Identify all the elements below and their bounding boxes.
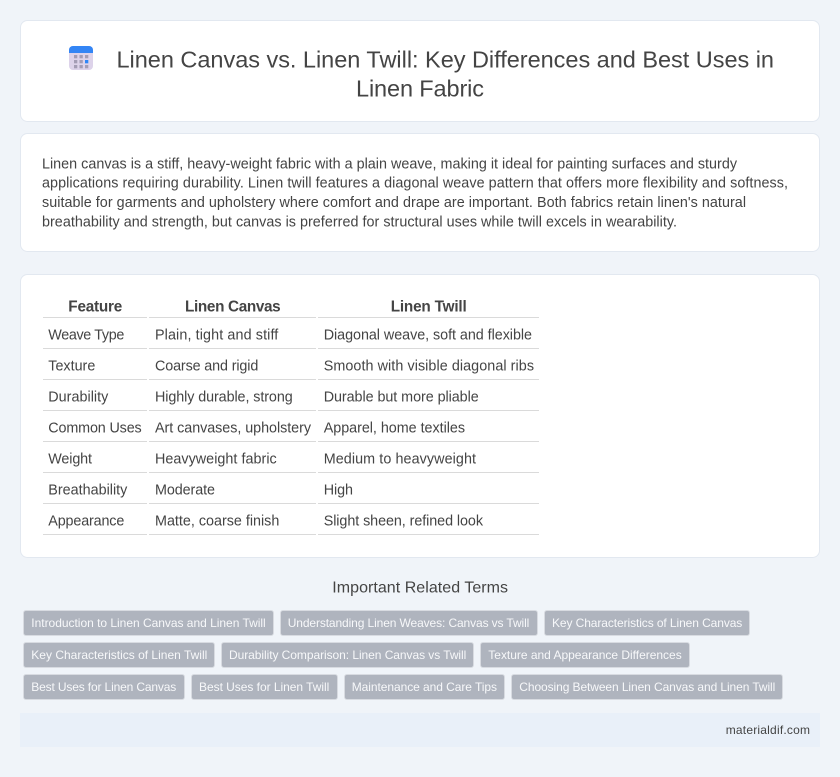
table rules	[43, 317, 539, 535]
related term chips	[24, 610, 782, 700]
title	[116, 46, 774, 102]
icon: calendar grid	[69, 46, 93, 70]
title: Linen Fabric	[356, 76, 484, 102]
row: breathability: High	[324, 482, 353, 498]
related term chips: Best Uses for Linen Twill	[199, 680, 329, 694]
summary text: Linen canvas is a stiff, heavy-weight fabric with a plain weave, making it ideal for painting surfaces and sturdy	[42, 156, 738, 172]
related term chips: Understanding Linen Weaves: Canvas vs Twill	[288, 616, 529, 630]
footer source: materialdif.com	[726, 723, 810, 737]
comparison table panel	[20, 274, 820, 558]
comparison table	[43, 299, 539, 535]
row: texture: Coarse and rigid	[155, 358, 258, 374]
row: common uses: Common Uses	[48, 420, 142, 436]
related term chips: Texture and Appearance Differences	[488, 648, 682, 662]
row: weight: Medium to heavyweight	[324, 451, 476, 467]
table header row: Linen Twill	[391, 299, 467, 316]
row: durability	[48, 389, 479, 405]
row: appearance: Slight sheen, refined look	[324, 513, 484, 529]
row: texture	[48, 358, 534, 374]
footer bar	[20, 713, 820, 747]
row: texture: Smooth with visible diagonal ribs	[324, 358, 534, 374]
table header row	[68, 299, 467, 316]
table header row: Feature	[68, 299, 122, 316]
row: weave type: Weave Type	[48, 327, 124, 343]
related term chips: Key Characteristics of Linen Twill	[31, 648, 207, 662]
related term chips: Best Uses for Linen Canvas	[31, 680, 176, 694]
row: durability: Highly durable, strong	[155, 389, 293, 405]
row: weave type: Plain, tight and stiff	[155, 327, 278, 343]
related term chips: Choosing Between Linen Canvas and Linen Twill	[519, 680, 775, 694]
summary text: suitable for garments and upholstery where comfort and drape are important. Both fabrics retain linen's natural	[42, 195, 746, 211]
row: breathability	[48, 482, 353, 498]
row: appearance: Matte, coarse finish	[155, 513, 279, 529]
row: common uses: Apparel, home textiles	[324, 420, 465, 436]
related term chips: Durability Comparison: Linen Canvas vs Twill	[229, 648, 466, 662]
row: appearance	[48, 513, 484, 529]
row: weight	[48, 451, 476, 467]
summary panel	[20, 134, 820, 252]
row: weave type	[48, 327, 532, 343]
summary text: breathability and strength, but canvas is preferred for structural uses while twill excels in wearability.	[42, 214, 677, 230]
row: weight: Heavyweight fabric	[155, 451, 277, 467]
title: Linen Canvas vs. Linen Twill: Key Differences and Best Uses in	[116, 46, 774, 72]
related term chips: Maintenance and Care Tips	[352, 680, 497, 694]
row: breathability: Breathability	[48, 482, 128, 498]
table header row: Linen Canvas	[185, 299, 281, 316]
row: common uses: Art canvases, upholstery	[155, 420, 312, 436]
related terms heading: Important Related Terms	[332, 580, 508, 597]
row: texture: Texture	[48, 358, 95, 374]
summary text	[42, 156, 788, 230]
related term chips: Introduction to Linen Canvas and Linen Twill	[31, 616, 266, 630]
summary text: applications requiring durability. Linen twill features a diagonal weave pattern that offers more flexibility and softness,	[42, 176, 788, 192]
row: common uses	[48, 420, 465, 436]
row: appearance: Appearance	[48, 513, 124, 529]
header card	[20, 20, 820, 122]
row: weave type: Diagonal weave, soft and flexible	[324, 327, 532, 343]
row: weight: Weight	[48, 451, 92, 467]
row: durability: Durability	[48, 389, 109, 405]
related term chips: Key Characteristics of Linen Canvas	[552, 616, 742, 630]
row: durability: Durable but more pliable	[324, 389, 479, 405]
row: breathability: Moderate	[155, 482, 215, 498]
